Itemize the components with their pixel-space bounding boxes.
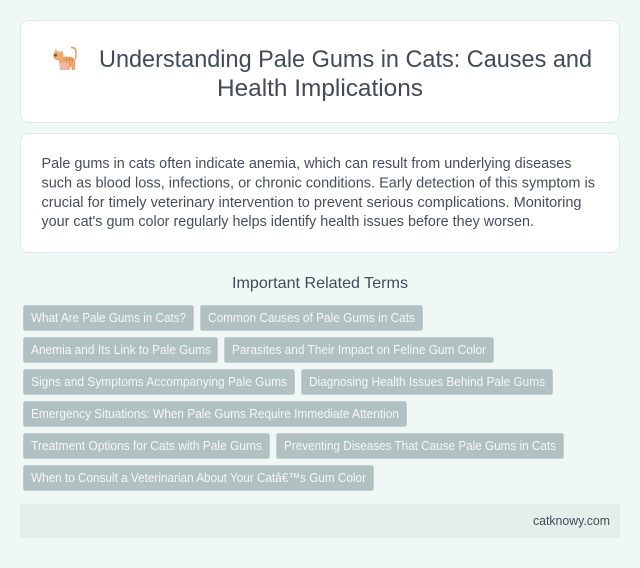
tag	[302, 370, 552, 394]
tag: Anemia and Its Link to Pale Gums	[31, 342, 211, 357]
text block: description	[42, 155, 595, 230]
title: Understanding Pale Gums in Cats: Causes and	[99, 46, 592, 73]
tag	[24, 466, 374, 490]
tag: Emergency Situations: When Pale Gums Require Immediate Attention	[31, 406, 399, 421]
tag: When to Consult a Veterinarian About Your Catâ€™s Gum Color	[31, 470, 367, 485]
tag	[276, 434, 564, 458]
heading: related terms: Important Related Terms	[232, 275, 408, 292]
tag	[24, 402, 406, 426]
tag	[200, 306, 422, 330]
tag	[224, 338, 494, 362]
tag: Common Causes of Pale Gums in Cats	[208, 310, 415, 325]
title	[99, 46, 592, 102]
footer: site name: catknowy.com	[533, 513, 610, 528]
text block: description: such as blood loss, infections, or chronic conditions. Early detection of this symptom is	[42, 174, 595, 192]
tag: Signs and Symptoms Accompanying Pale Gums	[31, 374, 287, 389]
text block: description: Pale gums in cats often indicate anemia, which can result from underlying diseases	[42, 155, 572, 172]
footer	[20, 504, 620, 538]
tag: Treatment Options for Cats with Pale Gums	[31, 438, 262, 453]
tag list	[24, 306, 564, 490]
panel: title card	[20, 20, 620, 122]
tag	[24, 434, 270, 458]
tag: Parasites and Their Impact on Feline Gum Color	[232, 342, 487, 357]
tag	[24, 338, 218, 362]
text block: description: your cat's gum color regularly helps identify health issues before they worsen.	[42, 213, 534, 230]
tag	[24, 306, 194, 330]
tag: Diagnosing Health Issues Behind Pale Gums	[309, 374, 545, 389]
title: Health Implications	[217, 75, 423, 102]
icon: cat	[53, 47, 77, 70]
tag: Preventing Diseases That Cause Pale Gums in Cats	[284, 438, 556, 453]
text block: description: crucial for timely veterinary intervention to prevent serious complications. Monitoring	[42, 194, 582, 211]
tag	[24, 370, 294, 394]
panel: description	[20, 134, 620, 252]
tag: What Are Pale Gums in Cats?	[31, 310, 186, 325]
